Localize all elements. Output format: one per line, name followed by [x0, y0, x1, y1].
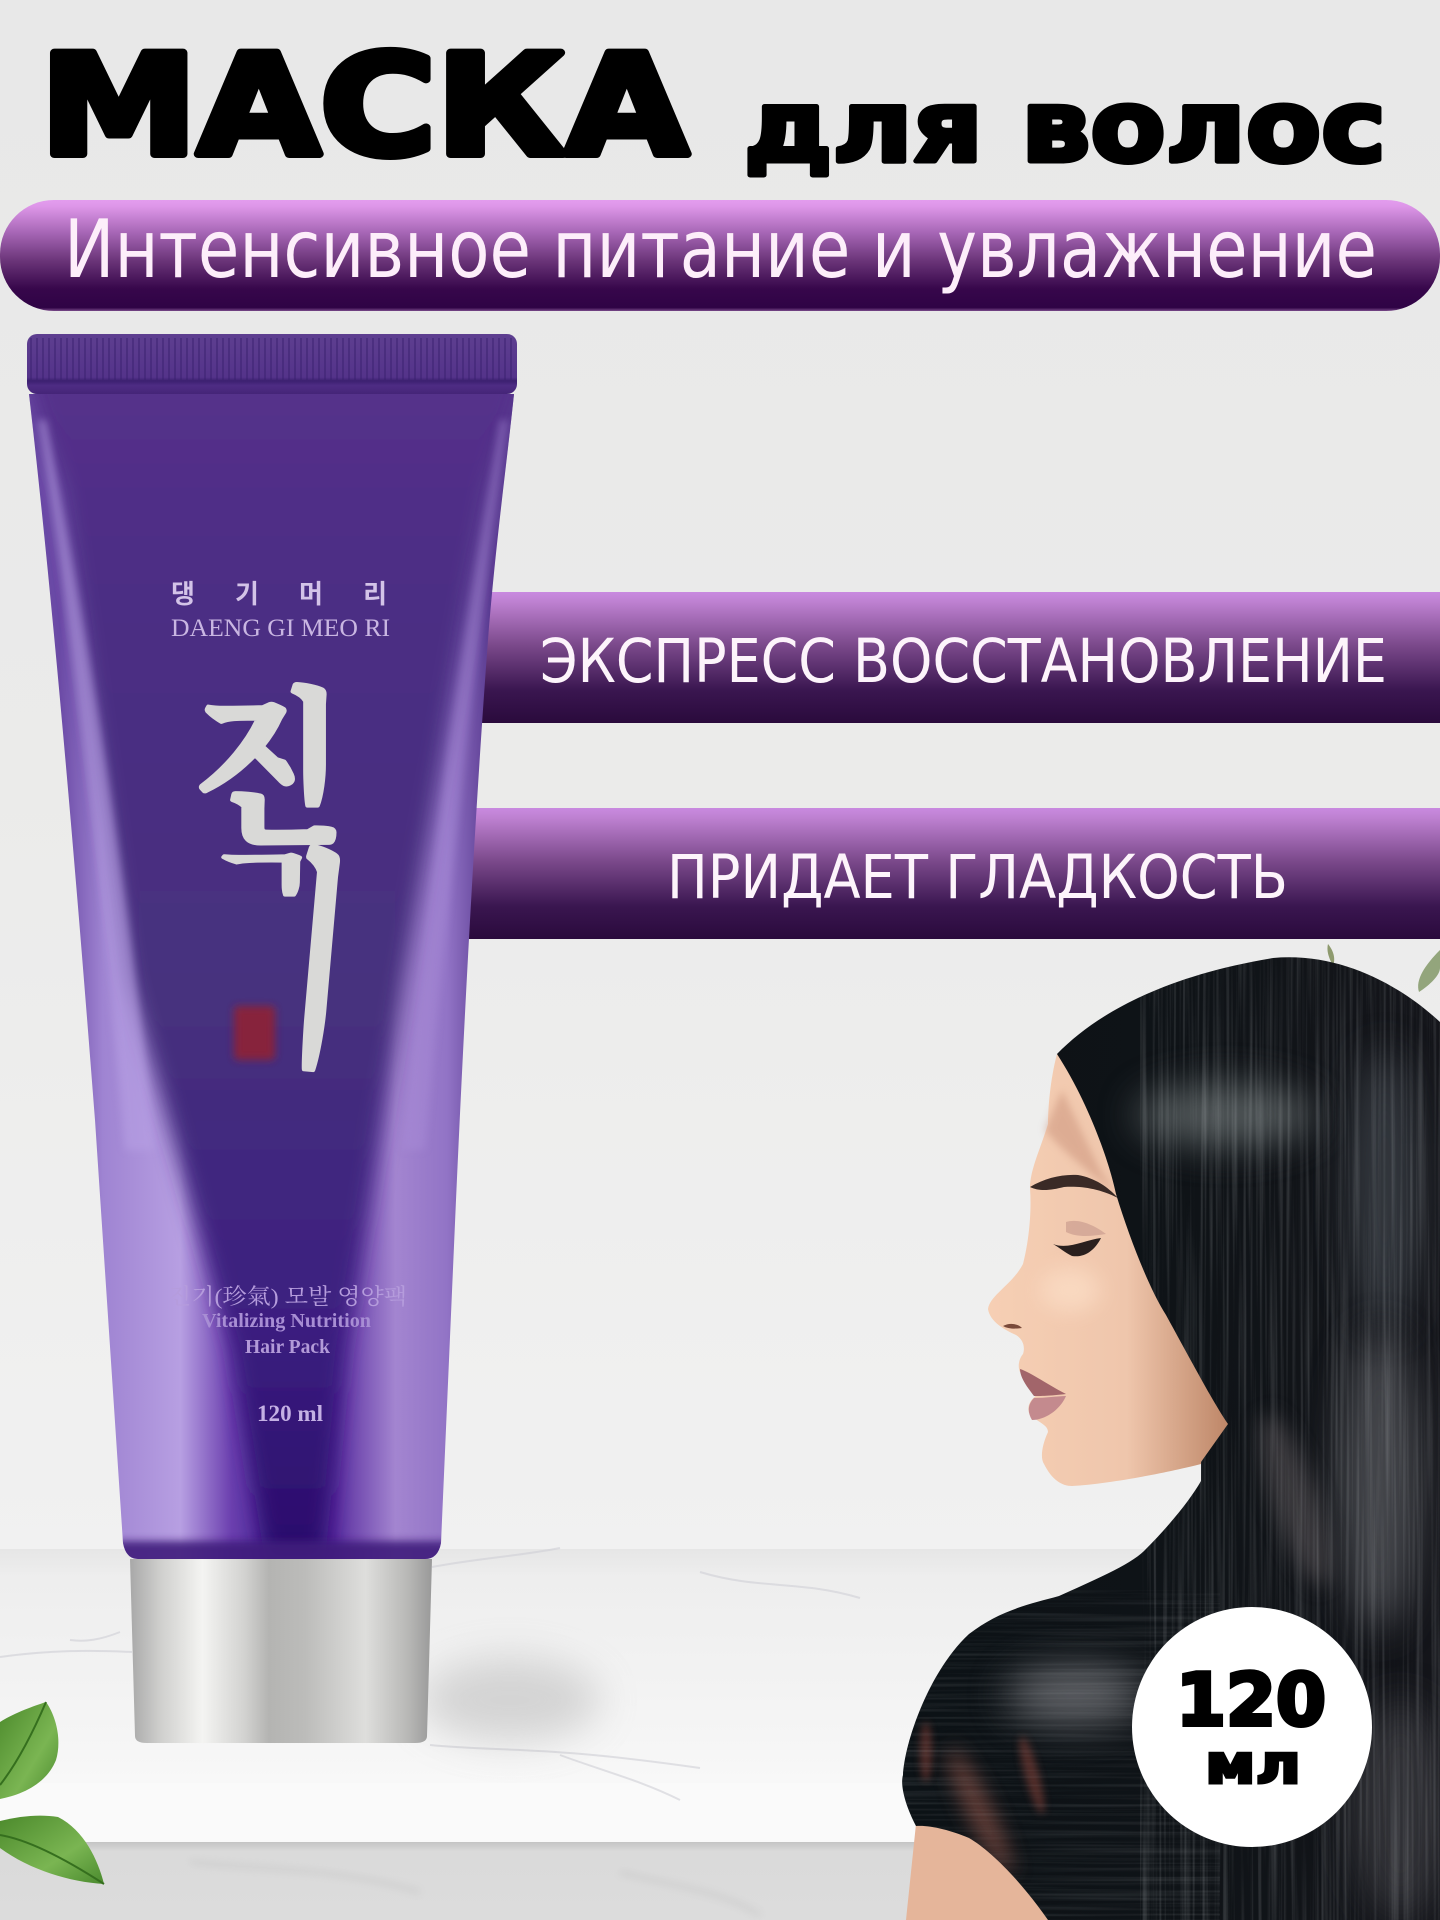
lips	[1020, 1369, 1066, 1396]
banner: smoothness: ПРИДАЕТ ГЛАДКОСТЬ	[667, 842, 1288, 913]
product name latin: Vitalizing Nutrition	[202, 1310, 371, 1332]
heading words: для волос: для волос	[744, 68, 1386, 185]
tube cap	[130, 1559, 432, 1743]
hair sheen	[1135, 1085, 1315, 1145]
face and neck	[988, 1054, 1240, 1486]
brand latin: DAENG GI MEO RI	[171, 615, 390, 642]
banner: smoothness	[440, 808, 1440, 939]
badge number: 120	[1176, 1658, 1326, 1742]
hair mass	[902, 957, 1440, 1920]
tube body	[29, 394, 514, 1559]
woman with hair	[900, 950, 1440, 1920]
red seal	[234, 1006, 275, 1060]
calligraphy logo: 진	[190, 634, 346, 879]
icon: background leaf	[1327, 944, 1440, 992]
volume on tube: 120 ml	[257, 1401, 323, 1426]
nostril	[1003, 1324, 1022, 1329]
banner: subtitle pill	[0, 200, 1440, 311]
calligraphy logo: ㅣ	[234, 774, 408, 1119]
calligraphy logo	[190, 634, 408, 1119]
heading word: МАСКА: МАСКА	[40, 25, 688, 187]
brand hangul: 댕 기 머 리	[171, 574, 387, 611]
badge unit: мл	[1205, 1733, 1301, 1796]
product name hangul: 진기(珍氣) 모발 영양팩	[168, 1284, 407, 1309]
marble shelf	[0, 1548, 1440, 1920]
product name line two: Hair Pack	[245, 1336, 331, 1358]
banner: express recovery	[440, 592, 1440, 723]
hair strands vertical	[1140, 950, 1440, 1920]
badge: volume 120 ml	[1132, 1607, 1372, 1847]
heading: МАСКА для волос	[40, 25, 1386, 187]
shoulder	[906, 1824, 1060, 1920]
eyebrow	[1030, 1175, 1118, 1198]
calligraphy logo: ㄱ	[200, 809, 324, 930]
eye	[1053, 1238, 1101, 1256]
tube crimp	[27, 334, 517, 394]
face shadow	[1045, 1090, 1116, 1194]
icon: mint leaves	[0, 1702, 104, 1884]
product tube	[0, 334, 540, 1743]
hair strands shoulder	[900, 1590, 1220, 1920]
